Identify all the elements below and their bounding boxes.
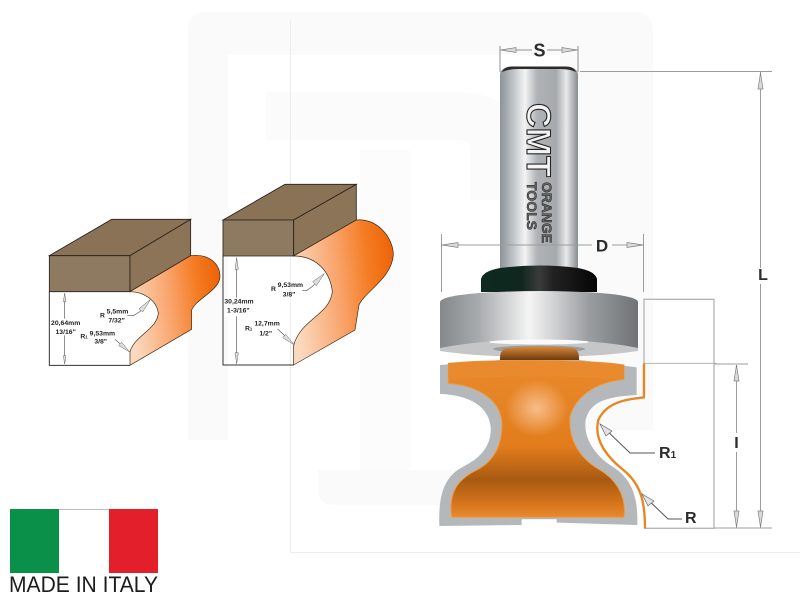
- radius R label: 3/8": [283, 292, 295, 299]
- radius R label: R: [100, 312, 105, 319]
- black collar: [481, 266, 597, 292]
- radius R1 label: [80, 330, 129, 352]
- height dimension: [224, 258, 254, 364]
- radius R1 label: 3/8": [94, 339, 107, 346]
- dimension S: [500, 40, 578, 72]
- background watermark: [188, 12, 800, 552]
- dimension I: [714, 364, 748, 528]
- white front outline: [49, 292, 130, 365]
- router bit: [439, 66, 638, 526]
- radius R label: 5,5mm: [107, 308, 128, 315]
- height dimension: 30,24mm: [224, 299, 254, 306]
- orange nut: [500, 346, 579, 360]
- cut profile outline: [597, 299, 717, 528]
- height dimension: 20,64mm: [51, 320, 80, 327]
- Italian flag: [10, 509, 158, 573]
- CMT logo: [519, 103, 557, 243]
- dimension L: [580, 72, 772, 528]
- height dimension: [51, 293, 80, 364]
- timber block: [223, 184, 356, 256]
- grey cutting profile: [439, 360, 637, 526]
- profile drawing: large moulding: [223, 184, 393, 365]
- dimension S: S: [533, 40, 546, 60]
- profile drawing: small moulding: [49, 219, 220, 365]
- CMT logo: ORANGE: [539, 182, 555, 243]
- CMT logo: TOOLS: [524, 182, 540, 230]
- bearing: [440, 291, 638, 357]
- height dimension: 1-3/16": [227, 307, 250, 314]
- radius R label: [271, 274, 324, 299]
- dimension D: [442, 234, 644, 292]
- orange moulding face: [130, 255, 220, 365]
- orange moulding face: [294, 220, 393, 365]
- radius R1 label: R1: [245, 326, 253, 333]
- radius label R: [642, 494, 697, 527]
- radius label R: R: [685, 510, 697, 527]
- timber block: [49, 219, 191, 292]
- orange body: [448, 361, 624, 517]
- dimension D: D: [596, 236, 608, 256]
- radius label R1: R1: [659, 445, 677, 462]
- radius R1 label: 9,53mm: [90, 330, 115, 337]
- radius R label: [100, 299, 151, 324]
- radius R1 label: R1: [80, 334, 88, 341]
- dimension I: I: [734, 435, 739, 452]
- CMT logo: CMT: [519, 103, 557, 177]
- radius R1 label: 1/2": [259, 331, 272, 338]
- radius R label: 7/32": [108, 317, 125, 324]
- dimension L: L: [758, 267, 768, 284]
- radius R1 label: 12,7mm: [254, 321, 280, 328]
- shank: [500, 66, 578, 268]
- radius label R1: [600, 424, 677, 462]
- radius R label: R: [271, 286, 276, 293]
- radius R1 label: [245, 321, 294, 345]
- white front outline: [223, 256, 294, 365]
- height dimension: 13/16": [56, 329, 76, 336]
- radius R label: 9,53mm: [278, 282, 303, 289]
- cutter body: [439, 360, 637, 526]
